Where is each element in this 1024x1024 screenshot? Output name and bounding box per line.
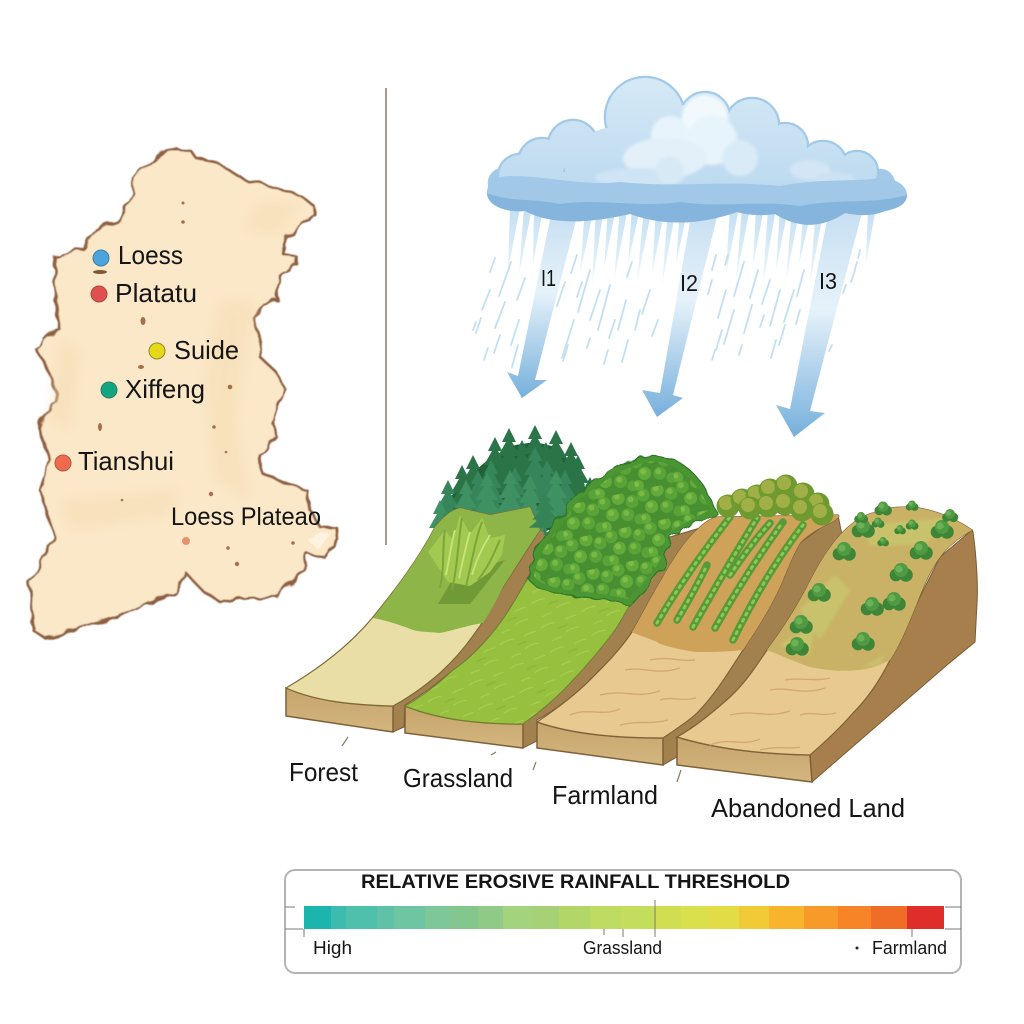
- abandoned side wall: [810, 530, 977, 782]
- forest grass area: [373, 507, 540, 633]
- grass tuft: [428, 515, 505, 604]
- cloud body: [499, 78, 877, 200]
- marker: Xiffeng: Xiffeng: [125, 374, 205, 404]
- map markers and labels: [55, 240, 321, 531]
- map: Loess Plateau: [30, 147, 338, 638]
- cloud highlights: [595, 95, 855, 188]
- farmland front face: [537, 722, 663, 765]
- color scale bar: [304, 906, 944, 929]
- front tree: [529, 493, 561, 535]
- label I1: I1: [541, 265, 556, 291]
- marker: Platatu: Platatu: [115, 278, 197, 308]
- abandoned light patches: [780, 518, 950, 668]
- cloud: [487, 77, 907, 225]
- small ticks under slopes: [342, 737, 681, 782]
- abandoned upper vegetation: [767, 507, 972, 671]
- slope: grassland: [405, 455, 717, 748]
- legend title: RELATIVE EROSIVE RAINFALL THRESHOLD: [361, 872, 790, 893]
- grassland front face: [405, 706, 523, 748]
- divider: [385, 88, 387, 545]
- label: Farmland: Farmland: [552, 780, 658, 810]
- farmland side wall: [663, 515, 842, 765]
- arrow I2: [642, 205, 720, 417]
- grassland side wall: [523, 515, 717, 748]
- grassland canopy: [528, 455, 717, 605]
- abandoned cracks: [710, 678, 836, 750]
- scale label: Farmland: Farmland: [872, 938, 947, 958]
- abandoned front face: [677, 737, 812, 782]
- label I2: I2: [680, 270, 698, 296]
- label: Forest: Forest: [289, 757, 359, 787]
- cloud base band: [487, 176, 907, 225]
- farmland top trees: [716, 474, 834, 526]
- grassland surface: [405, 530, 660, 724]
- map east lobe highlight: [308, 532, 330, 550]
- arrow I3: [776, 205, 864, 437]
- marker: Tianshui: Tianshui: [78, 446, 174, 476]
- scale ticks: [285, 900, 961, 937]
- land-use labels: [289, 757, 905, 823]
- cloud outline lobes: [489, 77, 894, 198]
- forest trees: [422, 425, 608, 568]
- cloud underside: [487, 193, 907, 225]
- map speckles: [93, 202, 295, 566]
- abandoned surface: [677, 507, 972, 755]
- marker: Suide: Suide: [174, 335, 239, 365]
- farmland cracks: [570, 659, 696, 725]
- farmland surface: [537, 515, 839, 738]
- slope: farmland: [537, 474, 842, 765]
- crop rows: [657, 517, 803, 640]
- label: Grassland: Grassland: [403, 763, 513, 793]
- marker: Loess: Loess: [118, 240, 183, 270]
- forest front face: [286, 688, 393, 732]
- label I3: I3: [819, 268, 837, 294]
- scale label: Grassland: Grassland: [583, 938, 662, 958]
- shrubs: [786, 500, 958, 656]
- map shading: [50, 200, 300, 530]
- map label: Loess Plateao: [171, 503, 321, 531]
- forest side wall: [393, 530, 555, 732]
- marker: Loess: [93, 240, 183, 270]
- terrain: four land-use slopes: [286, 425, 977, 782]
- slope: forest: [286, 425, 608, 732]
- legend panel: [285, 870, 961, 973]
- rain streaks: [473, 208, 876, 367]
- slope: abandoned land: [677, 500, 977, 782]
- arrow I1: [507, 205, 580, 398]
- farmland upper soil: [632, 515, 839, 652]
- scale label: High: High: [313, 938, 352, 958]
- forest surface: [286, 507, 540, 706]
- label: Abandoned Land: Abandoned Land: [711, 793, 905, 823]
